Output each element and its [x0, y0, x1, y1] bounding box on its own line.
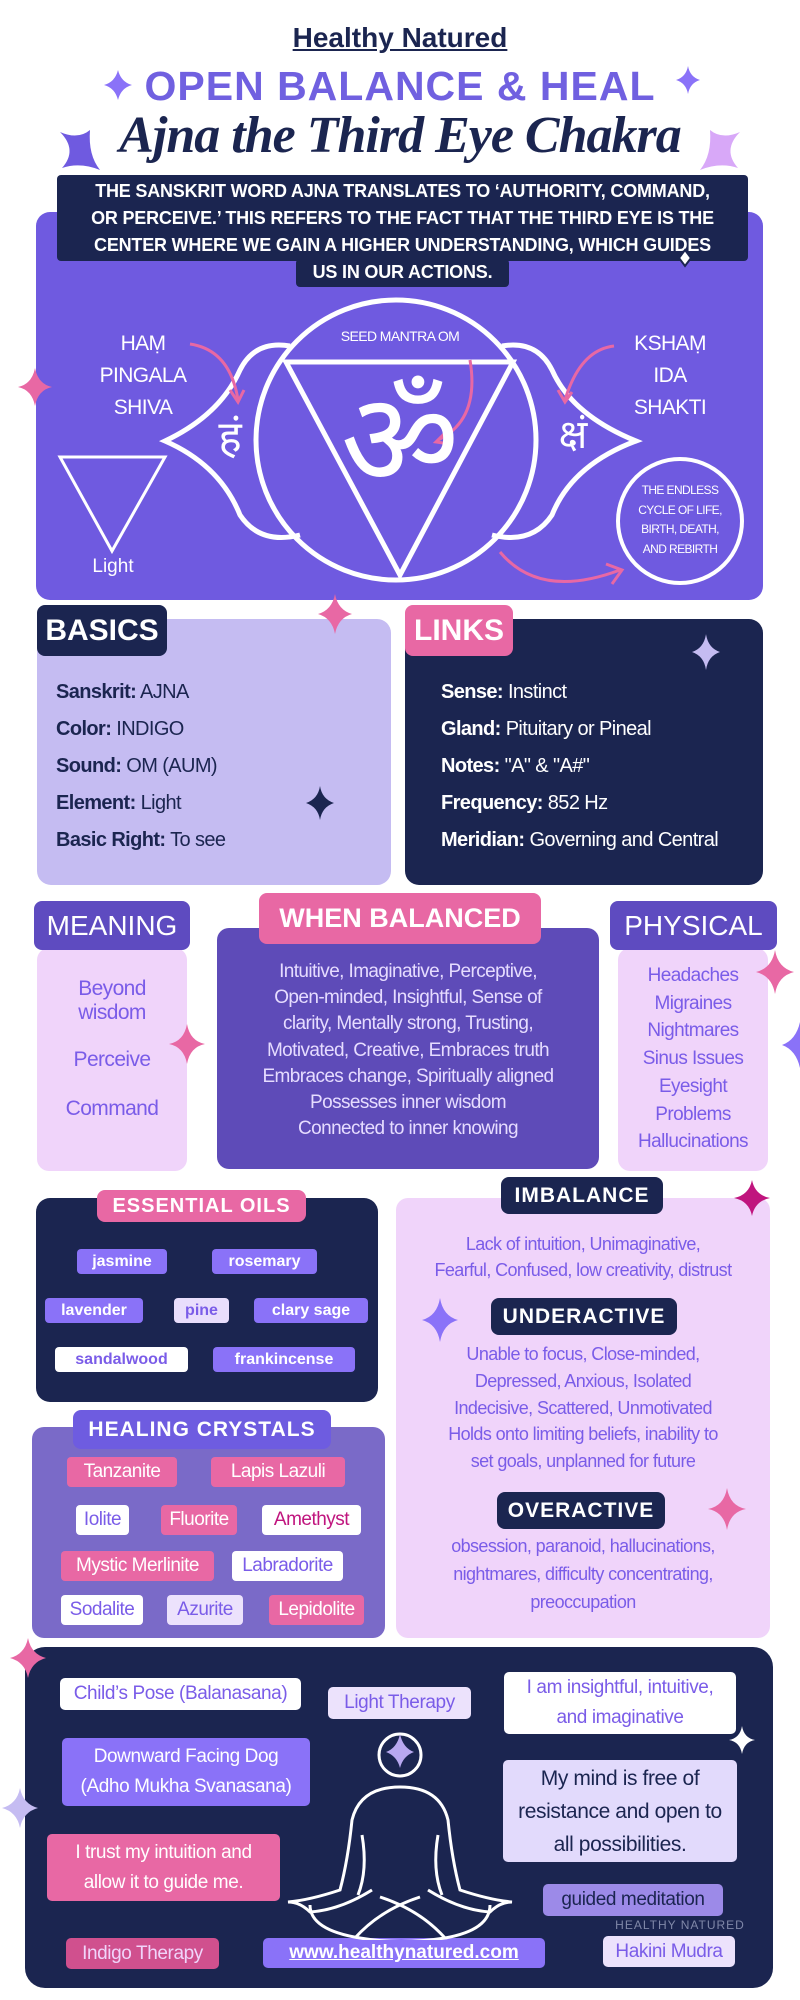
bija ksham glyph: क्षं [559, 412, 587, 458]
seed mantra label: SEED MANTRA OM [341, 328, 459, 344]
panel: physical: PHYSICAL [624, 910, 763, 940]
heading: open balance & heal: OPEN BALANCE & HEAL [144, 63, 656, 109]
endless cycle text: CYCLE OF LIFE, [638, 502, 722, 516]
panel: meaning: Beyond [78, 977, 146, 1000]
practice tags: guided meditation [561, 1889, 705, 1910]
panel: imbalance: OVERACTIVE [508, 1498, 654, 1522]
panel: links: Notes: "A" & "A#" [441, 755, 589, 777]
practice tags: Indigo Therapy [82, 1942, 203, 1964]
panel: healing crystals: Mystic Merlinite [76, 1555, 199, 1576]
panel: when balanced [217, 893, 599, 1169]
labels right [634, 332, 706, 419]
panel: healing crystals: Amethyst [274, 1509, 349, 1530]
panel: imbalance: Depressed, Anxious, Isolated [475, 1371, 691, 1391]
panel: healing crystals: Labradorite [242, 1555, 333, 1576]
panel: links: Sense: Instinct [441, 681, 567, 703]
practice tags: and imaginative [556, 1707, 684, 1728]
panel: physical: Eyesight [659, 1076, 727, 1097]
panel: physical: Hallucinations [638, 1131, 748, 1152]
panel: physical: Problems [655, 1104, 731, 1125]
practice tags: My mind is free of [541, 1766, 699, 1790]
heading: script title: Ajna the Third Eye Chakra [119, 107, 681, 164]
chakra symbol diagram [18, 248, 744, 585]
light label: Light [92, 556, 134, 577]
panel: essential oils: jasmine [92, 1252, 152, 1270]
panel: basics [37, 605, 391, 885]
stars around title [60, 66, 740, 170]
icon: meditating figure [288, 1732, 512, 1940]
panel: imbalance: UNDERACTIVE [503, 1304, 665, 1328]
panel: basics: BASICS [45, 614, 159, 646]
panel: basics: Color: INDIGO [56, 718, 184, 740]
panel: when balanced: Connected to inner knowing [298, 1118, 518, 1139]
endless cycle text: BIRTH, DEATH, [641, 522, 719, 536]
practice tags: allow it to guide me. [84, 1872, 243, 1892]
panel: physical: Migraines [655, 993, 731, 1014]
panel: essential oils: lavender [61, 1302, 127, 1318]
panel: imbalance: obsession, paranoid, hallucinations, [451, 1536, 715, 1556]
panel: when balanced: Motivated, Creative, Embraces truth [267, 1040, 549, 1061]
panel: when balanced: Embraces change, Spiritually aligned [262, 1066, 554, 1087]
panel: healing crystals: Tanzanite [84, 1461, 160, 1482]
intro text block: CENTER WHERE WE GAIN A HIGHER UNDERSTANDING, WHICH GUIDES [94, 235, 711, 255]
panel: links: LINKS [414, 614, 504, 646]
panel: healing crystals: Sodalite [70, 1599, 134, 1620]
om glyph: ॐ [341, 364, 459, 516]
bija ham glyph: हं [218, 412, 242, 463]
panel: imbalance: Fearful, Confused, low creativity, distrust [434, 1260, 732, 1280]
stars row 2 [306, 594, 720, 820]
panel: healing crystals: Iolite [84, 1509, 121, 1530]
practice tags: Hakini Mudra [615, 1940, 723, 1962]
panel: imbalance: set goals, unplanned for future [471, 1451, 695, 1471]
intro text block [57, 175, 748, 287]
practice tags: resistance and open to [518, 1800, 722, 1822]
endless cycle text: AND REBIRTH [643, 542, 717, 556]
panel: essential oils: rosemary [228, 1252, 301, 1270]
panel: imbalance: IMBALANCE [514, 1184, 650, 1206]
panel: imbalance: preoccupation [530, 1592, 636, 1612]
panel: physical: Nightmares [647, 1020, 739, 1041]
panel: imbalance: Holds onto limiting beliefs, inability to [448, 1424, 718, 1444]
labels left: HAṂ [121, 332, 165, 355]
panel: healing crystals [32, 1410, 385, 1638]
practice tags: www.healthynatured.com [289, 1942, 519, 1963]
stars bottom [2, 1638, 755, 1828]
panel: basics: Sound: OM (AUM) [56, 755, 217, 777]
panel: essential oils: ESSENTIAL OILS [112, 1194, 291, 1216]
labels right: SHAKTI [634, 396, 706, 419]
panel: physical: Headaches [648, 965, 738, 986]
panel: when balanced: Possesses inner wisdom [310, 1092, 506, 1113]
panel: meaning: wisdom [78, 1001, 146, 1024]
panel: basics: Basic Right: To see [56, 829, 225, 851]
panel: healing crystals: Lapis Lazuli [231, 1461, 325, 1482]
stars row 4 [422, 1180, 770, 1530]
panel: imbalance: Lack of intuition, Unimaginative, [466, 1234, 700, 1254]
panel: main chakra [36, 212, 763, 600]
panel: meaning: Command [66, 1097, 158, 1120]
panel: imbalance: Unable to focus, Close-minded, [466, 1344, 700, 1364]
panel: basics: Element: Light [56, 792, 181, 814]
watermark: HEALTHY NATURED [615, 1918, 745, 1932]
practice tags: Downward Facing Dog [94, 1746, 278, 1767]
labels left: PINGALA [100, 364, 186, 387]
panel: when balanced: Intuitive, Imaginative, Perceptive, [279, 961, 537, 982]
panel: physical: Sinus Issues [643, 1048, 743, 1069]
panel: meaning: MEANING [47, 910, 177, 940]
practice tags [47, 1672, 737, 1969]
practice tags: Child’s Pose (Balanasana) [74, 1683, 287, 1704]
endless cycle text: THE ENDLESS [642, 483, 718, 497]
panel: essential oils: pine [185, 1302, 218, 1318]
panel: essential oils: sandalwood [75, 1350, 168, 1368]
panel: imbalance: nightmares, difficulty concentrating, [453, 1564, 713, 1584]
panel: basics: Sanskrit: AJNA [56, 681, 189, 703]
intro text block: US IN OUR ACTIONS. [313, 262, 492, 282]
panel: imbalance [396, 1177, 770, 1638]
panel: essential oils: clary sage [272, 1302, 350, 1318]
intro text block: OR PERCEIVE.’ THIS REFERS TO THE FACT THAT THE THIRD EYE IS THE [91, 208, 714, 228]
practice tags: (Adho Mukha Svanasana) [81, 1776, 291, 1797]
panel: healing crystals: Lepidolite [278, 1599, 355, 1620]
practice tags: Light Therapy [344, 1692, 455, 1713]
intro text block: THE SANSKRIT WORD AJNA TRANSLATES TO ‘AUTHORITY, COMMAND, [95, 181, 710, 201]
panel: essential oils: frankincense [235, 1350, 333, 1368]
panel: links: Frequency: 852 Hz [441, 792, 608, 814]
practice tags: all possibilities. [554, 1832, 686, 1856]
panel: healing crystals: Fluorite [169, 1509, 229, 1530]
practice tags: I am insightful, intuitive, [527, 1677, 713, 1698]
labels right: IDA [653, 364, 687, 387]
stars row 3 [169, 950, 800, 1068]
endless cycle text [638, 483, 722, 556]
labels right: KSHAṂ [634, 332, 706, 355]
panel: practices [25, 1647, 773, 1988]
panel: when balanced: WHEN BALANCED [279, 903, 521, 933]
panel: healing crystals: Azurite [177, 1599, 233, 1620]
labels left [100, 332, 187, 419]
panel: physical [610, 901, 777, 1171]
panel: when balanced: clarity, Mentally strong, Trusting, [283, 1013, 533, 1034]
panel: essential oils [36, 1190, 378, 1402]
panel: links: Gland: Pituitary or Pineal [441, 718, 651, 740]
brand title: Healthy Natured [293, 22, 507, 53]
panel: links [405, 605, 763, 885]
panel: meaning [34, 901, 190, 1171]
panel: healing crystals: HEALING CRYSTALS [88, 1418, 316, 1440]
panel: links: Meridian: Governing and Central [441, 829, 718, 851]
practice tags: I trust my intuition and [75, 1842, 252, 1862]
panel: imbalance: Indecisive, Scattered, Unmotivated [454, 1398, 712, 1418]
labels left: SHIVA [114, 396, 172, 419]
panel: meaning: Perceive [74, 1048, 150, 1071]
panel: when balanced: Open-minded, Insightful, Sense of [274, 987, 542, 1008]
